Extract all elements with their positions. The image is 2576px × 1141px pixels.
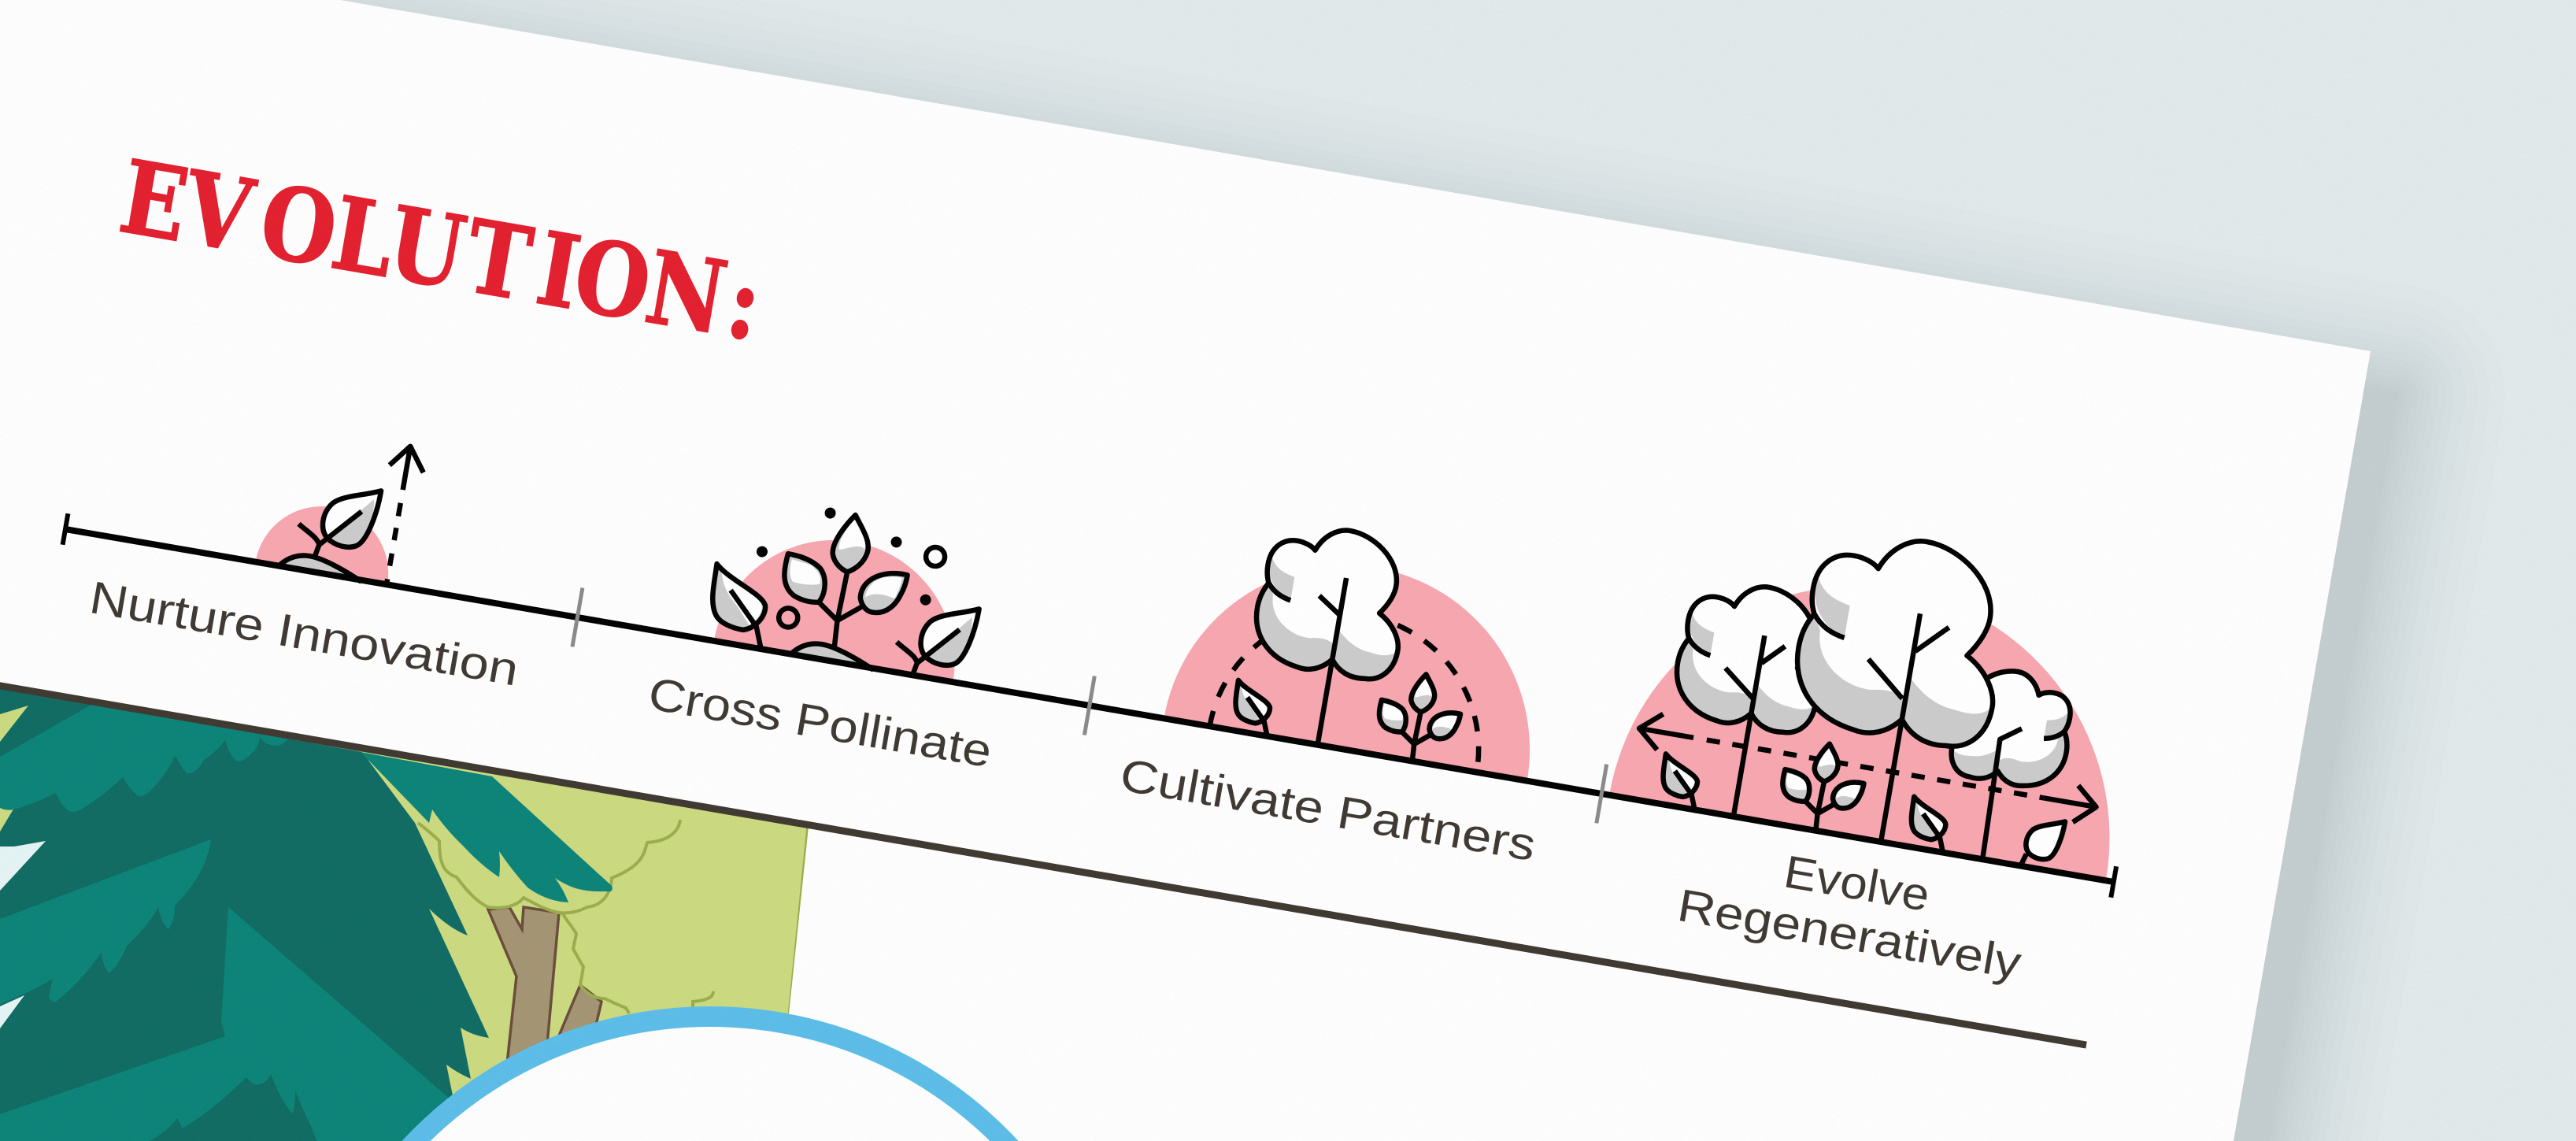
illustration: forest scene xyxy=(0,687,809,1141)
teal branch lower xyxy=(0,907,492,1141)
label: Cultivate Partners: Cultivate Partners xyxy=(1116,749,1539,871)
label: Evolve Regeneratively: Evolve xyxy=(1780,846,1934,921)
rotated sheet content xyxy=(0,130,2182,1045)
dark conifer xyxy=(0,687,489,1141)
teal branch right xyxy=(361,752,613,902)
step 3 pink semicircle xyxy=(1164,537,1558,781)
timeline axis xyxy=(61,500,2119,911)
meadow gaps at left xyxy=(0,706,28,832)
bottom rule xyxy=(0,684,2086,1045)
icon: forest with outward arrows xyxy=(1627,499,2136,877)
step 4 pink semicircle xyxy=(1609,546,2149,880)
deciduous tree crown outline xyxy=(418,820,713,1013)
pale sky patches xyxy=(0,841,46,1028)
icon: seedling with growth arrow xyxy=(279,428,427,589)
blue ring xyxy=(402,1006,1019,1141)
meadow background xyxy=(288,739,809,1095)
step 1 pink semicircle xyxy=(255,496,398,584)
teal branch upper left xyxy=(0,705,288,812)
title: EVOLUTION: xyxy=(112,138,770,365)
dark patch lower xyxy=(150,1074,316,1141)
label: Nurture Innovation: Nurture Innovation xyxy=(86,572,522,696)
label: Evolve Regeneratively: Regeneratively xyxy=(1674,880,2025,989)
label: Cross Pollinate: Cross Pollinate xyxy=(645,668,996,777)
icon: cross-pollinating plants xyxy=(704,490,992,686)
label: Evolve Regeneratively xyxy=(1674,829,2034,989)
brown trunks xyxy=(488,907,601,1071)
icon: tree with partner plants in dashed arc xyxy=(1210,513,1513,772)
teal branch middle xyxy=(0,839,211,1004)
step 2 pink semicircle xyxy=(714,521,974,682)
right edge of illustration xyxy=(787,828,809,1014)
